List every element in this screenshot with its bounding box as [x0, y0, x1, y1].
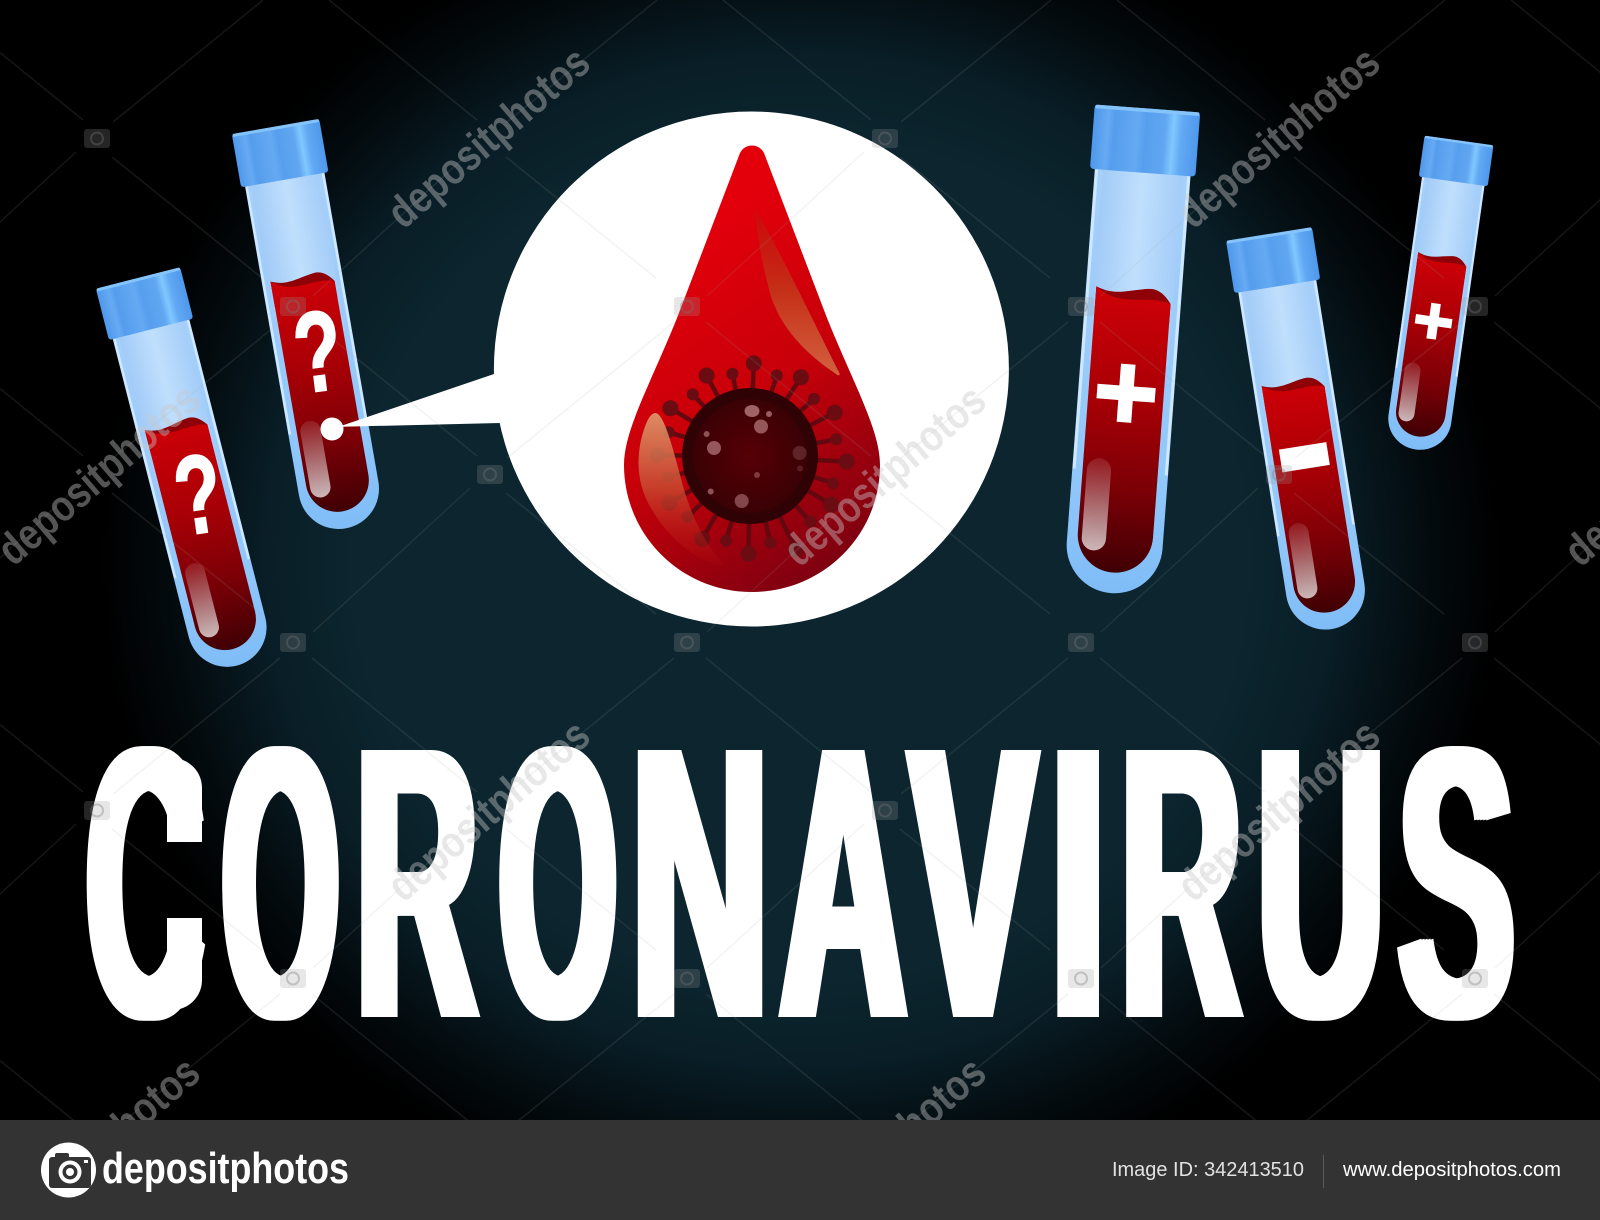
title: R: [356, 667, 477, 1100]
icon: blood drop with virus: [624, 146, 880, 592]
test tube: question mark sampled: [232, 119, 389, 536]
watermarks: depositphotos: [1168, 37, 1389, 238]
title: R: [1121, 667, 1241, 1100]
title: [86, 667, 1514, 1100]
callout: magnified blood sample: [320, 112, 1009, 626]
icon: camera logo: [41, 1142, 96, 1198]
watermark cameras: [84, 129, 1488, 988]
title: C: [86, 667, 204, 1100]
logo wordmark: depositphotos: [102, 1144, 349, 1193]
test tube: positive large: [1058, 105, 1200, 597]
title: S: [1398, 667, 1514, 1100]
watermarks: depositphotos: [774, 375, 995, 576]
image id: Image ID: 342413510: [1112, 1159, 1304, 1181]
watermarks: depositphotos: [378, 710, 599, 911]
watermarks: depositphotos: [1168, 710, 1389, 911]
test tube: question mark left: ?: [166, 430, 230, 560]
title: A: [780, 667, 907, 1100]
title: O: [222, 667, 339, 1100]
title: V: [909, 667, 1037, 1100]
test tube: positive small: [1381, 136, 1493, 454]
title: I: [1038, 667, 1118, 1100]
test tube: negative: [1226, 227, 1375, 636]
test tube: question mark sampled: ?: [287, 286, 349, 418]
footer bar: [0, 1120, 1600, 1220]
title: U: [1257, 667, 1384, 1100]
watermarks: depositphotos: [378, 37, 599, 238]
test tube: question mark left: [96, 267, 279, 676]
title: O: [499, 667, 616, 1100]
title: N: [631, 667, 769, 1100]
virus: [649, 355, 855, 562]
website url: www.depositphotos.com: [1342, 1159, 1561, 1181]
